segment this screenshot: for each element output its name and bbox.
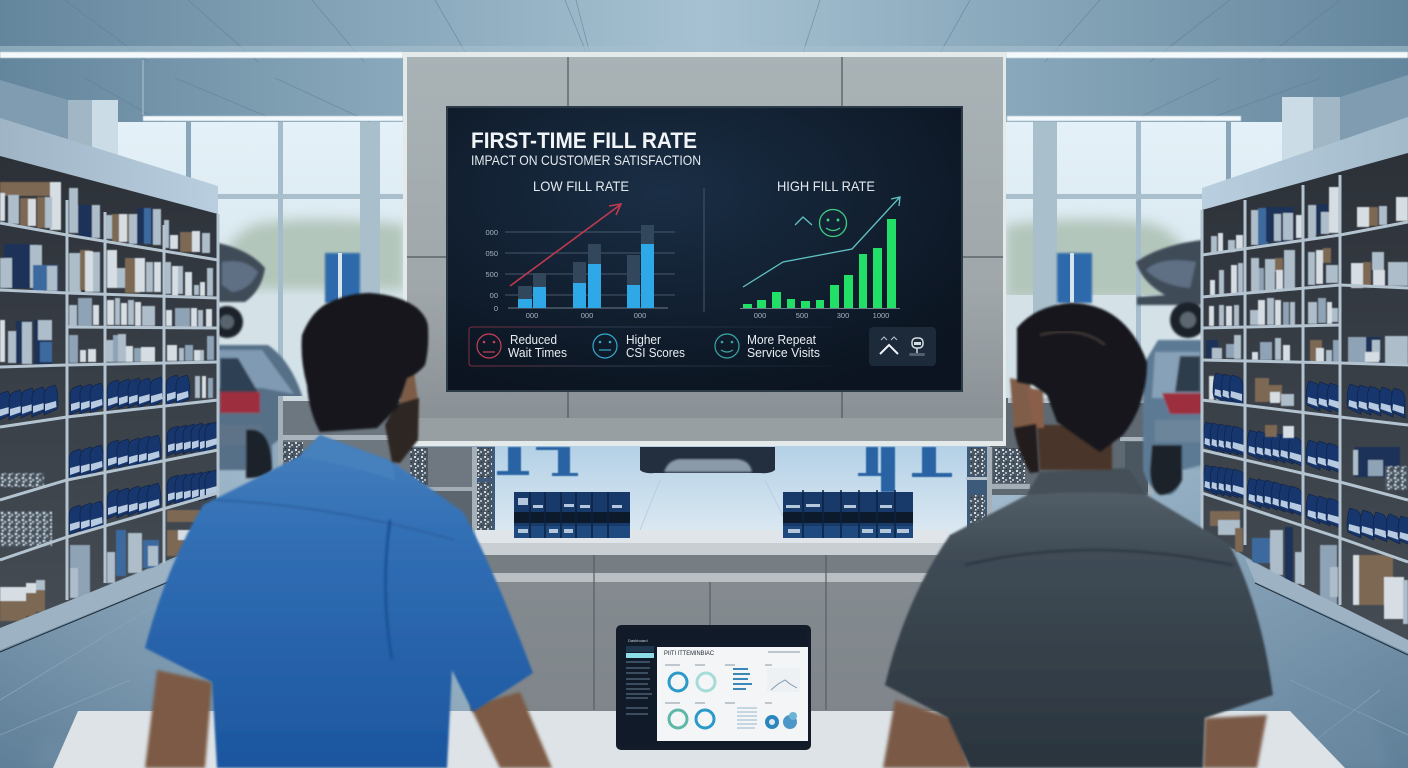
chart: high fill rate: 1000 xyxy=(873,311,889,320)
ceiling light strips xyxy=(0,52,1408,121)
chart: high fill rate xyxy=(740,178,900,320)
vehicle lifts xyxy=(497,447,952,492)
car under panel xyxy=(640,447,775,473)
plinth xyxy=(0,555,185,650)
chart heading: low fill rate: LOW FILL RATE xyxy=(533,178,629,194)
shelf back xyxy=(0,156,218,630)
chart: high fill rate: 500 xyxy=(796,311,808,320)
chart: low fill rate: 050 xyxy=(485,249,498,258)
subtitle: IMPACT ON CUSTOMER SATISFACTION xyxy=(471,152,701,168)
panel: right shelving unit xyxy=(1202,117,1408,655)
icon: green smiley xyxy=(820,210,846,236)
chart: low fill rate: 0 xyxy=(494,304,498,313)
background: left window xyxy=(60,122,405,412)
chart: high fill rate: 300 xyxy=(837,311,849,320)
boxes: left top shelves xyxy=(0,182,214,398)
back shelving unit: right xyxy=(966,398,1153,531)
shelf fascia xyxy=(0,118,218,214)
icon: teal smiley xyxy=(715,334,739,358)
arms xyxy=(883,700,1267,768)
storage bins on counter: right xyxy=(783,490,913,538)
shirt details xyxy=(965,468,1232,565)
background: floor xyxy=(0,470,1408,768)
background: left wall pillar xyxy=(0,80,118,170)
cabinets xyxy=(470,555,960,715)
benefit: reduced wait times: Wait Times xyxy=(508,346,567,360)
benefit: higher CSI scores: CSI Scores xyxy=(626,346,685,360)
tablet dashboard content xyxy=(657,647,808,741)
benefit: higher CSI scores: Higher xyxy=(626,333,661,347)
chart heading: high fill rate: HIGH FILL RATE xyxy=(777,178,875,194)
beard xyxy=(1014,424,1039,473)
person: left technician xyxy=(145,293,552,768)
car parked: left xyxy=(218,345,304,478)
chart: low fill rate: 000 xyxy=(526,311,538,320)
storage bins: right xyxy=(1203,373,1408,546)
shelf back xyxy=(1202,153,1408,643)
boxes: left lower shelves xyxy=(0,473,200,621)
boxes: right top shelves xyxy=(1206,187,1408,406)
face sliver xyxy=(1010,378,1036,430)
chart: low fill rate: 00 xyxy=(490,291,498,300)
wall-mounted screen xyxy=(446,106,963,392)
icon box xyxy=(869,327,936,366)
benefit: more repeat service visits: Service Visits xyxy=(747,346,820,360)
background: right wall pillar xyxy=(1282,75,1408,172)
benefit: more repeat service visits: More Repeat xyxy=(747,333,816,347)
counter with cabinets xyxy=(470,530,960,715)
chart: low fill rate: 000 xyxy=(485,228,498,237)
icon: blue neutral face xyxy=(593,334,617,358)
shelf boards xyxy=(1202,175,1408,605)
chart: low fill rate: 000 xyxy=(581,311,593,320)
tablet xyxy=(616,625,811,750)
benefits strip xyxy=(469,327,833,366)
ear and face sliver xyxy=(397,372,418,420)
panel: left shelving unit xyxy=(0,118,219,652)
tablet dashboard content: PIITI ITTEMINBIAC xyxy=(664,651,715,657)
gray shirt xyxy=(885,468,1273,768)
title: FIRST-TIME FILL RATE xyxy=(471,128,697,153)
counter top xyxy=(475,530,950,555)
car on lift: right xyxy=(1136,240,1206,338)
benefit: reduced wait times: Reduced xyxy=(510,333,557,347)
plinth xyxy=(1245,558,1408,653)
car parked: right xyxy=(1143,340,1202,495)
ear xyxy=(1027,388,1044,428)
beard xyxy=(385,398,419,463)
icon: red neutral face xyxy=(477,334,501,358)
shirt details xyxy=(215,436,455,660)
back shelving unit: left xyxy=(278,396,495,531)
hair xyxy=(302,293,428,432)
hair xyxy=(1017,303,1147,452)
background: ceiling xyxy=(0,0,1408,150)
boxes: right lower shelves xyxy=(1210,425,1408,624)
arrow: teal trend xyxy=(743,197,900,287)
chart: high fill rate: 000 xyxy=(754,311,766,320)
central floor view xyxy=(495,445,967,535)
shelf fascia xyxy=(1202,117,1408,210)
arrow: red trend xyxy=(510,204,621,286)
person: right technician xyxy=(883,303,1273,768)
arms xyxy=(145,670,552,768)
shelf boards xyxy=(0,200,218,600)
desk xyxy=(53,711,1345,768)
chart: low fill rate xyxy=(485,178,675,320)
car on lift: left xyxy=(211,243,265,338)
neck xyxy=(1037,425,1112,470)
chart: low fill rate: 000 xyxy=(634,311,646,320)
blue shirt xyxy=(145,435,533,768)
storage bins: left xyxy=(0,375,219,535)
icon: caret xyxy=(795,217,812,225)
tablet sidebar xyxy=(626,638,654,714)
display wall panel xyxy=(403,52,1006,446)
chart: low fill rate: 500 xyxy=(485,270,498,279)
background: right window xyxy=(1005,122,1350,412)
storage bins on counter: left xyxy=(514,492,630,538)
tablet sidebar: Dashboard xyxy=(628,638,648,643)
